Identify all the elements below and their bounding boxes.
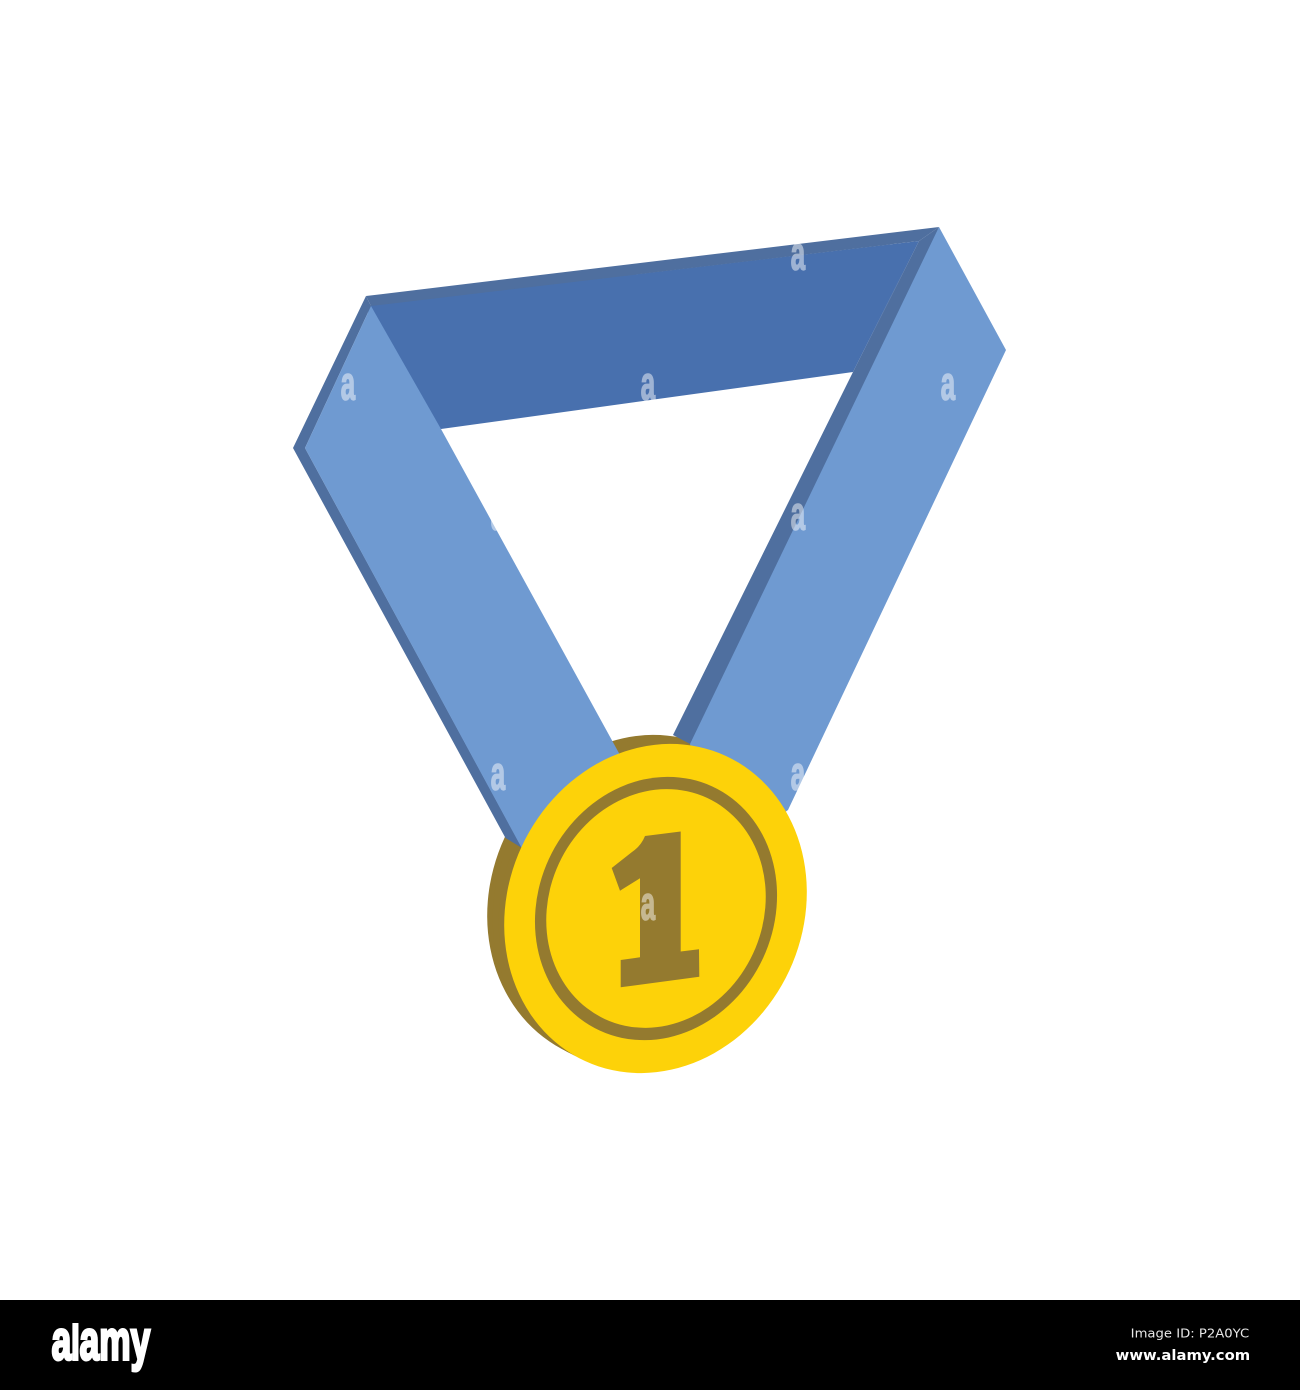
ribbon left edge shadow xyxy=(293,296,522,848)
ribbon left strap xyxy=(305,306,650,880)
medal face xyxy=(451,694,860,1123)
image id: Image ID: P2A0YC xyxy=(1131,1326,1249,1340)
ribbon top edge shadow xyxy=(366,227,939,306)
footer bar xyxy=(0,1300,1300,1390)
numeral one xyxy=(612,832,699,987)
ribbon right inner shadow xyxy=(673,227,939,760)
watermark letters: a xyxy=(641,879,656,931)
watermark letters: a xyxy=(491,749,506,801)
watermark letters: a xyxy=(941,359,956,411)
medal edge xyxy=(434,685,854,1120)
watermark letters xyxy=(341,229,956,931)
ribbon right strap xyxy=(690,227,1006,860)
ribbon back band xyxy=(365,241,919,431)
watermark letters: a xyxy=(791,749,806,801)
watermark letters: a xyxy=(491,489,506,541)
ribbon xyxy=(293,227,1006,880)
footer logo: alamy xyxy=(52,1309,150,1371)
website: www.alamy.com xyxy=(1116,1348,1250,1364)
medal front xyxy=(451,694,860,1123)
medal ring xyxy=(493,737,819,1080)
watermark letters: a xyxy=(341,359,356,411)
watermark letters: a xyxy=(641,359,656,411)
watermark letters: a xyxy=(791,489,806,541)
watermark letters: a xyxy=(791,229,806,281)
